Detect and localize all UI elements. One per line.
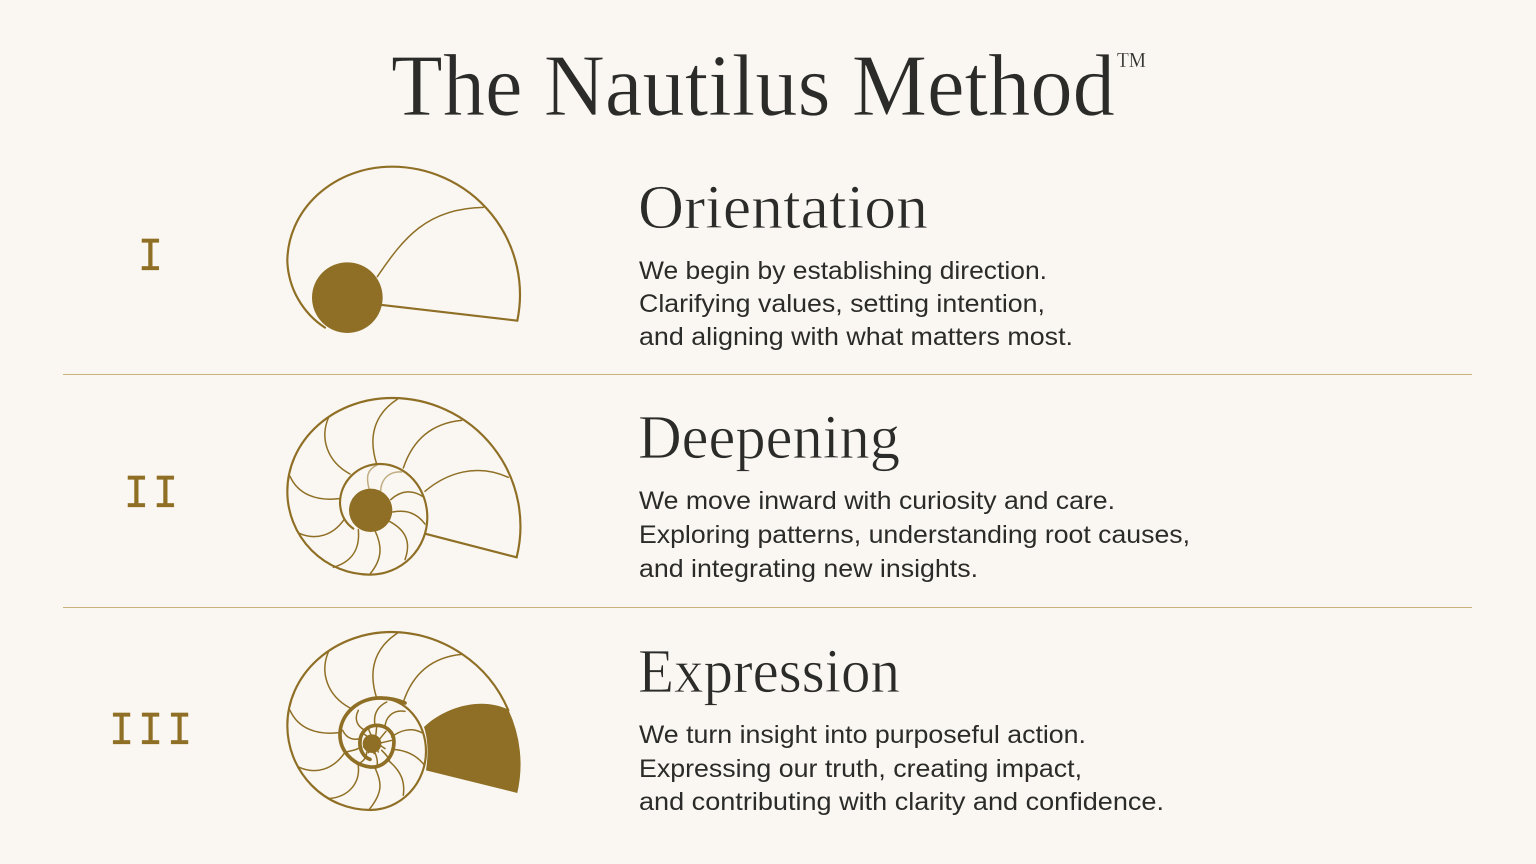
panel: expression [109,632,1164,816]
numeral II: II [124,469,178,522]
panel: deepening [124,398,1190,583]
text: deepening description: Exploring patterns, understanding root causes, [639,521,1190,549]
text: expression description [639,721,1164,816]
text: expression description: Expressing our truth, creating impact, [639,755,1082,783]
panel: orientation [138,167,1073,351]
title: TM [1117,48,1146,72]
icon: nautilus stage one [287,167,520,333]
text: orientation description: We begin by establishing direction. [639,257,1047,285]
icon: nautilus stage two [287,398,520,575]
heading: Orientation: Orientation [638,174,928,242]
text: expression description: and contributing with clarity and confidence. [639,788,1164,816]
text: expression description: We turn insight into purposeful action. [639,721,1086,749]
text: orientation description: Clarifying values, setting intention, [639,290,1045,318]
text: deepening description [639,487,1190,583]
numeral I: I [138,232,163,285]
text: deepening description: and integrating new insights. [639,555,978,583]
text: deepening description: We move inward with curiosity and care. [639,487,1115,515]
title: The Nautilus Method [391,38,1115,135]
heading: Expression: Expression [638,638,900,706]
text: orientation description [639,257,1073,351]
numeral III: III [109,706,192,759]
icon: nautilus stage three [287,632,521,810]
heading: Deepening: Deepening [638,404,900,472]
text: orientation description: and aligning with what matters most. [639,323,1073,351]
